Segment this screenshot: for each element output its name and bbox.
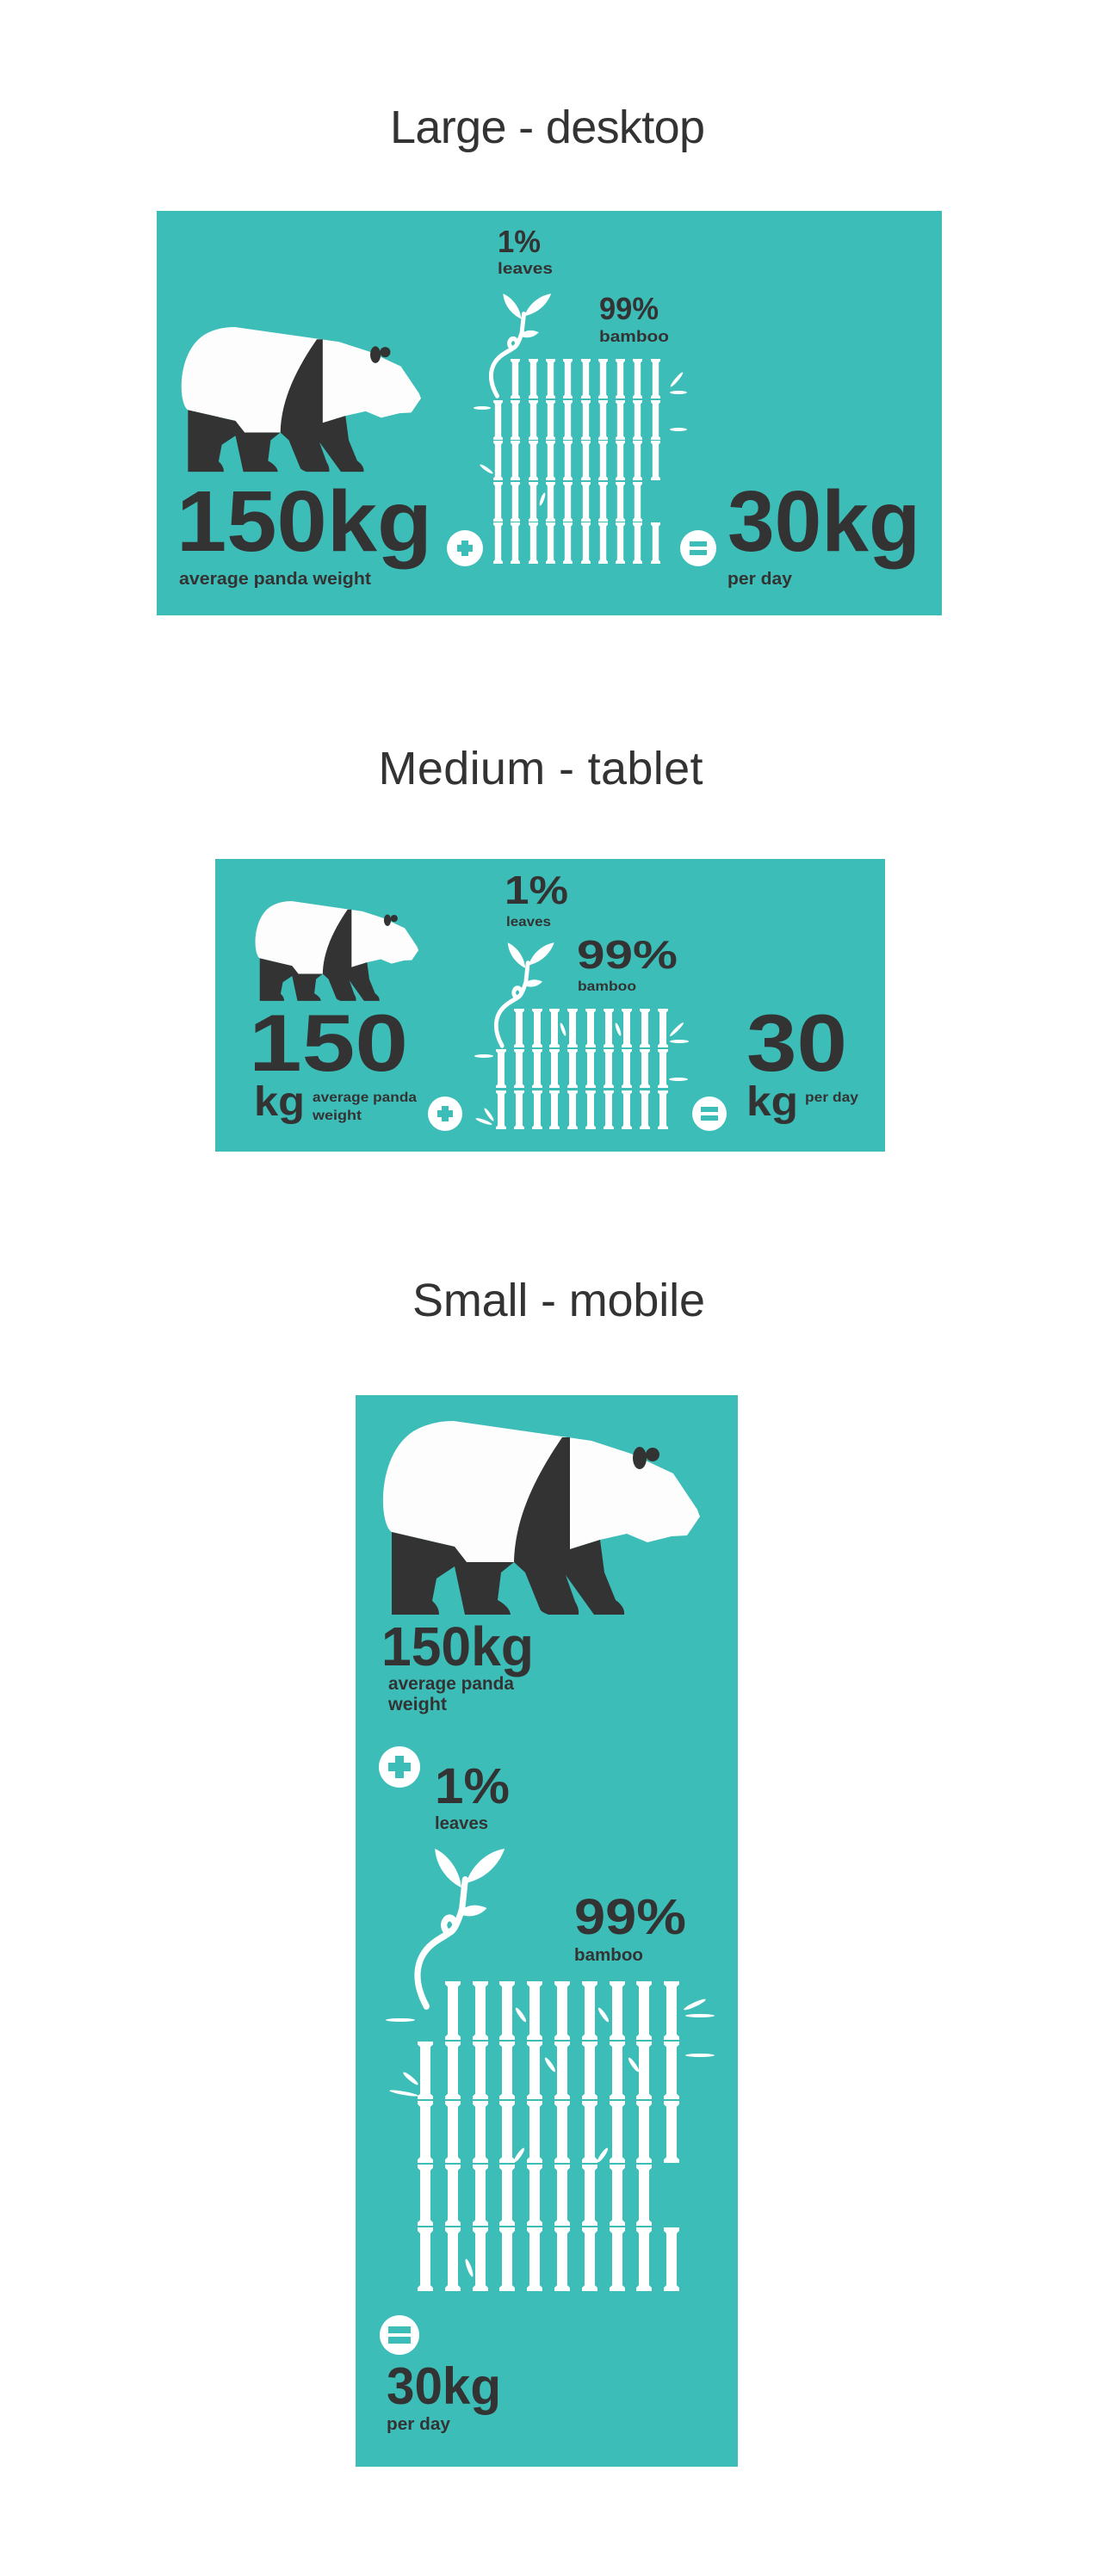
stat: 150kg large: 150kg [176,473,432,570]
stat: 150 kg medium: average panda [313,1090,417,1105]
stat: 1% leaves large: leaves [498,260,553,277]
stat: 30 kg medium [746,998,858,1125]
icon: vine medium [496,942,554,1046]
stat: 150 kg medium [249,998,417,1125]
panel: small mobile [356,1395,738,2467]
icon: panda large [182,327,421,472]
stat: 150kg small: weight [387,1695,447,1714]
title: small mobile: Small - mobile [412,1275,705,1326]
icon: equals small [380,2315,419,2355]
stat: 1% leaves small: leaves [435,1814,488,1833]
stat: 99% bamboo large: 99% [599,291,659,326]
title: large desktop: Large - desktop [390,102,705,153]
stat: 1% leaves large [498,224,553,277]
stat: 99% bamboo small: 99% [574,1889,686,1945]
stat: 99% bamboo large: bamboo [599,328,669,345]
stat: 30 kg medium: 30 [746,998,847,1088]
stat: 99% bamboo medium: 99% [577,932,678,977]
stat: 99% bamboo small: bamboo [574,1946,643,1965]
stat: 30 kg medium: kg [746,1079,798,1125]
stat: 30kg large: per day [727,570,793,589]
title: medium tablet: Medium - tablet [379,743,703,794]
icon: plus large [447,530,483,566]
stat: 150kg large: average panda weight [179,570,371,589]
stat: 150kg small: average panda [388,1674,514,1694]
stat: 150kg small: 150kg [381,1615,534,1677]
stat: 150kg small [381,1615,534,1714]
stat: 99% bamboo medium [577,932,678,994]
icon: equals medium [692,1096,727,1131]
icon: equals large [680,530,716,566]
stat: 30kg small: 30kg [387,2357,501,2415]
stat: 1% leaves medium [505,868,568,930]
icon: plus small [379,1746,420,1788]
icon: vine large [491,293,551,396]
stat: 30 kg medium: per day [805,1090,858,1105]
chart: bamboo grid small [386,1981,715,2291]
stat: 1% leaves small: 1% [435,1758,510,1814]
icon: panda small [383,1421,700,1615]
stat: 150 kg medium: weight [312,1109,362,1123]
stat: 99% bamboo large [599,291,669,345]
stat: 99% bamboo small [574,1889,686,1965]
icon: plus medium [428,1096,462,1131]
stat: 1% leaves large: 1% [498,224,541,259]
stat: 150 kg medium: kg [254,1079,305,1125]
stat: 1% leaves medium: 1% [505,868,568,912]
chart: bamboo grid medium [474,1009,689,1129]
icon: panda medium [256,901,418,1001]
chart: bamboo grid large [474,359,687,564]
panel: large desktop [157,211,942,615]
stat: 99% bamboo medium: bamboo [578,979,636,994]
stat: 30kg large: 30kg [727,473,920,570]
stat: 1% leaves medium: leaves [506,915,551,930]
stat: 30kg small: per day [387,2415,451,2434]
panel: medium tablet [215,859,885,1152]
stat: 150 kg medium: 150 [249,998,408,1088]
icon: vine small [418,1849,505,2006]
